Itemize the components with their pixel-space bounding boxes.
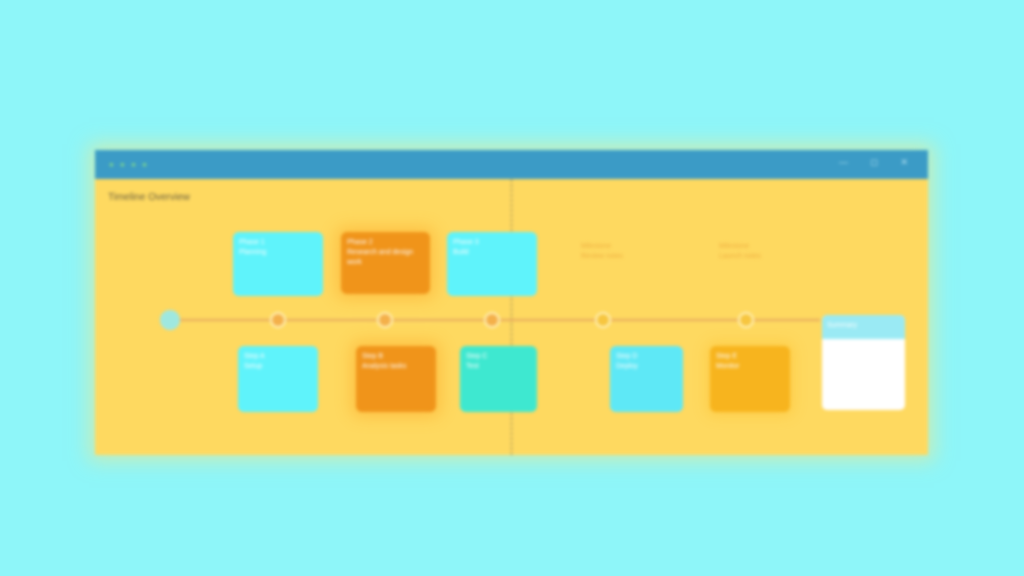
divider dashed bbox=[511, 179, 512, 455]
card top 2: Phase 2 bbox=[347, 239, 373, 246]
card bottom 5: Step E bbox=[716, 353, 737, 360]
node 2 bbox=[377, 312, 393, 328]
card bottom 4: Step D bbox=[616, 353, 637, 360]
card top 2 bbox=[341, 232, 430, 294]
card top 1: Phase 1 bbox=[239, 239, 265, 246]
card top 3 bbox=[447, 232, 537, 296]
window controls: — ◻ ✕ bbox=[839, 157, 918, 167]
heading: Timeline Overview bbox=[108, 192, 190, 203]
timeline axis bbox=[170, 319, 820, 321]
card bottom 4: Deploy bbox=[616, 363, 638, 370]
card bottom 2: Step B bbox=[362, 353, 383, 360]
summary header: Summary bbox=[827, 322, 857, 329]
card top 3: Build bbox=[453, 249, 469, 256]
card bottom 5 bbox=[710, 346, 790, 412]
summary card bbox=[822, 315, 905, 410]
text top 4 bbox=[581, 243, 623, 260]
card bottom 5: Monitor bbox=[716, 363, 739, 370]
card bottom 2: Analysis tasks bbox=[362, 363, 406, 370]
title bar bbox=[95, 150, 928, 179]
card top 1 bbox=[233, 232, 323, 296]
text top 4: Review notes bbox=[581, 253, 623, 260]
window dots: ● ● ● ● bbox=[109, 160, 149, 169]
card top 2: Research and design work bbox=[347, 249, 413, 266]
card bottom 3: Step C bbox=[466, 353, 487, 360]
node 1 bbox=[270, 312, 286, 328]
card top 1: Planning bbox=[239, 249, 266, 256]
card bottom 4 bbox=[610, 346, 683, 412]
text top 5 bbox=[719, 243, 761, 260]
text top 5: Launch notes bbox=[719, 253, 761, 260]
window panel bbox=[95, 150, 928, 455]
card bottom 1: Step A bbox=[244, 353, 265, 360]
start node bbox=[160, 310, 180, 330]
node 5 bbox=[738, 312, 754, 328]
node 3 bbox=[484, 312, 500, 328]
node 4 bbox=[595, 312, 611, 328]
card bottom 2 bbox=[356, 346, 436, 412]
card bottom 1: Setup bbox=[244, 363, 262, 370]
text top 5: Milestone bbox=[719, 243, 749, 250]
card bottom 3: Test bbox=[466, 363, 479, 370]
text top 4: Milestone bbox=[581, 243, 611, 250]
card top 3: Phase 3 bbox=[453, 239, 479, 246]
summary header bbox=[822, 315, 905, 339]
card bottom 1 bbox=[238, 346, 318, 412]
card bottom 3 bbox=[460, 346, 537, 412]
